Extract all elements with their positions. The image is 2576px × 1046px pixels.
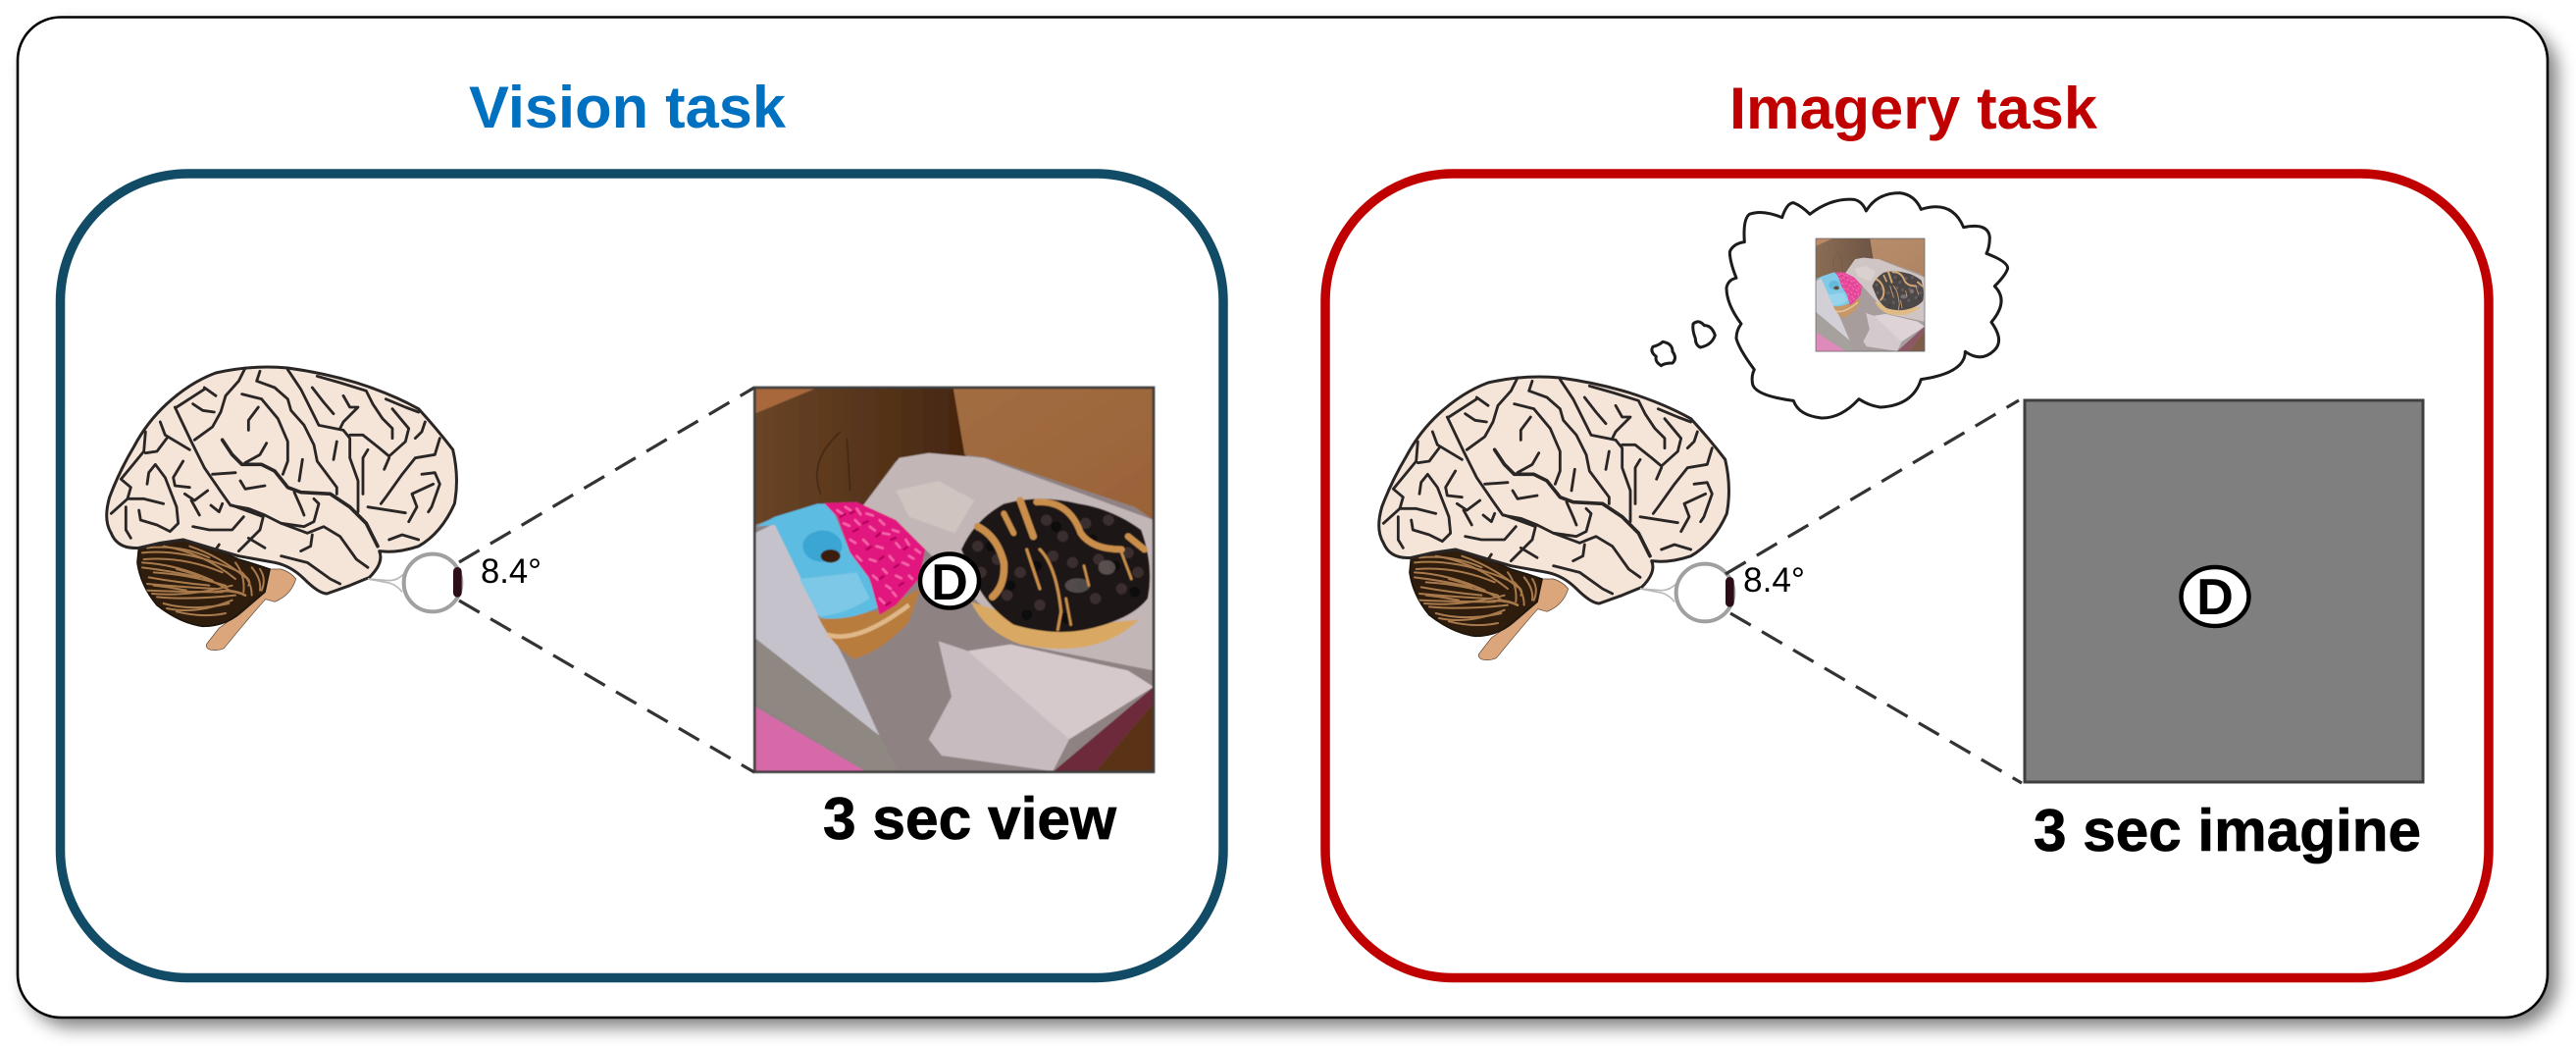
angle label: 8.4°	[481, 552, 541, 591]
fixation letter badge: D	[2196, 569, 2234, 626]
panel: imagery task	[1325, 174, 2489, 977]
caption: 3 sec view: 3 sec view	[823, 786, 1116, 852]
imagined donut photo	[1816, 238, 1925, 351]
heading: Vision task: Vision task	[469, 75, 787, 140]
fixation letter badge	[920, 553, 979, 611]
icon: brain and eye	[107, 367, 462, 651]
heading: Imagery task: Imagery task	[1729, 76, 2098, 141]
caption: 3 sec imagine: 3 sec imagine	[2034, 798, 2421, 863]
thought bubble	[1652, 193, 2008, 418]
gray imagery screen	[2025, 400, 2423, 782]
field of view lines	[1726, 400, 2022, 783]
icon: brain and eye	[1379, 377, 1734, 660]
fixation letter badge: D	[931, 554, 968, 611]
fixation letter badge	[2182, 567, 2248, 626]
field of view lines	[459, 388, 754, 772]
photo: two donuts in a box	[754, 388, 1154, 772]
angle label: 8.4°	[1743, 561, 1805, 600]
panel: vision task	[61, 174, 1223, 977]
